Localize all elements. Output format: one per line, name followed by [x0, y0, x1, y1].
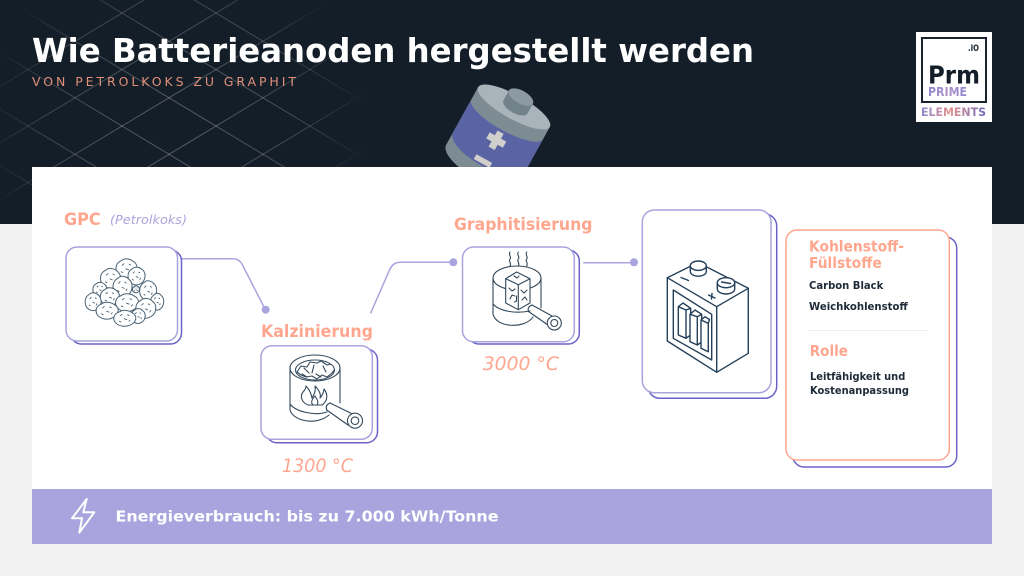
arrow: Graphitisierung to battery [583, 258, 638, 266]
list: filler materials [809, 280, 908, 313]
icon: furnace with flame [290, 355, 362, 428]
text: role description: Leitfähigkeit und [810, 371, 905, 383]
logo: PRIME [928, 85, 967, 99]
panel: Graphitisierung card [462, 247, 579, 344]
panel: battery card [642, 210, 777, 398]
white main panel [32, 167, 992, 489]
energy consumption text: Energieverbrauch: bis zu 7.000 kWh/Tonne [116, 507, 498, 525]
header background [0, 0, 1024, 224]
energy banner [32, 489, 992, 544]
logo: .IO [968, 44, 979, 54]
heading: Kohlenstoff-Füllstoffe: Füllstoffe [809, 254, 882, 272]
icon: finished battery cell [667, 261, 748, 372]
text: role description [810, 371, 909, 397]
heading: Kohlenstoff-Füllstoffe: Kohlenstoff- [809, 238, 904, 256]
panel: GPC card [66, 247, 182, 344]
heading: Kohlenstoff-Füllstoffe [809, 238, 904, 272]
text: role description: Kostenanpassung [810, 385, 909, 397]
value: 3000 °C: 3000 °C [483, 353, 560, 375]
panel: carbon fillers and role [786, 230, 957, 467]
icon: lightning bolt [72, 499, 94, 533]
title: Wie Batterieanoden hergestellt werden [32, 31, 754, 70]
list: filler materials: Weichkohlenstoff [809, 301, 908, 313]
arrow: GPC to Kalzinierung [182, 259, 270, 314]
heading: GPC: GPC [64, 210, 101, 230]
subtitle: VON PETROLKOKS ZU GRAPHIT [32, 74, 296, 89]
list: filler materials: Carbon Black [809, 280, 884, 292]
icon: tilted battery illustration [439, 71, 559, 198]
heading: Kalzinierung: Kalzinierung [261, 322, 373, 342]
label: Petrolkoks: (Petrolkoks) [110, 212, 187, 227]
icon: graphitisation furnace with cube [493, 252, 561, 330]
logo [916, 32, 992, 122]
arrow: Kalzinierung to Graphitisierung [370, 258, 457, 314]
logo: ELEMENTS [921, 105, 986, 119]
logo: Prm [928, 60, 980, 90]
icon: pile of petroleum coke [85, 259, 164, 326]
panel: Kalzinierung card [261, 346, 378, 443]
value: 1300 °C: 1300 °C [282, 455, 354, 477]
heading: Rolle: Rolle [810, 342, 848, 360]
heading: Graphitisierung: Graphitisierung [454, 215, 592, 235]
